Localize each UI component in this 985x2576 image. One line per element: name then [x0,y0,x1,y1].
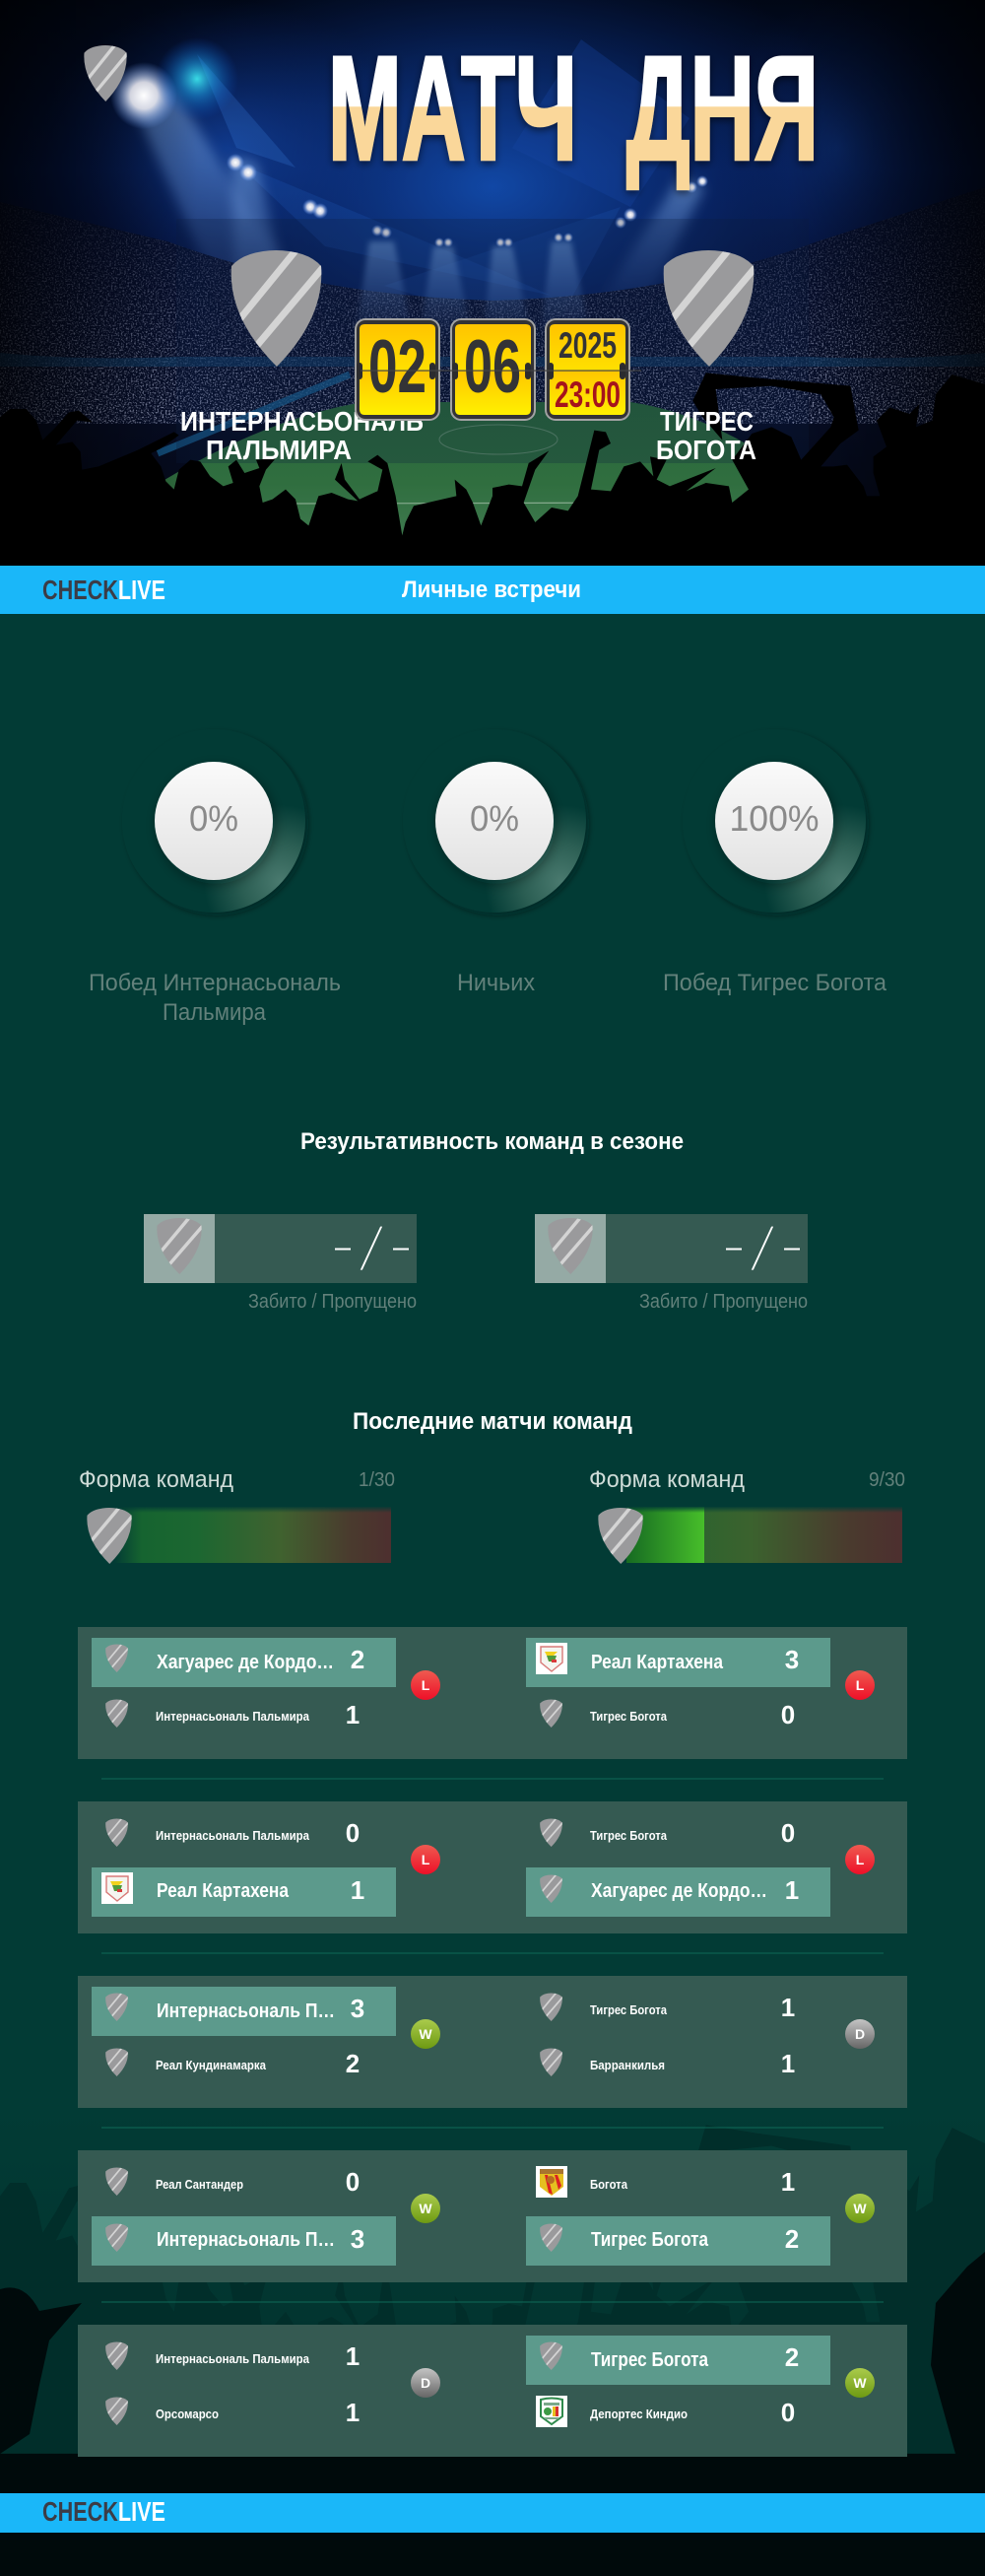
home side result [92,2167,440,2266]
home side result: 1 [346,2341,360,2371]
footer bar [0,2493,985,2533]
home side result: Интернасьональ Пальмира [156,2351,310,2366]
home team name: ПАЛЬМИРА [206,435,352,465]
home team crest [231,248,324,367]
away team crest [664,248,756,367]
home side result: W [419,2201,432,2216]
home side result: Интернасьональ П… [157,2000,335,2022]
home team name [180,406,424,465]
away side result: 0 [781,1818,795,1848]
logo: CheckLive footer: CHECKLIVE [42,2496,165,2527]
heading: recent matches: Последние матчи команд [353,1408,632,1435]
panel: away goals: – [784,1231,800,1263]
home side result: Интернасьональ П… [157,2229,335,2251]
logo: CheckLive: CHECKLIVE [42,575,165,605]
away side result: Тигрес Богота [590,1709,668,1724]
away side result: L [856,1852,865,1867]
away side result [526,2166,875,2266]
panel: home goals: – [335,1231,351,1263]
home side result: W [419,2026,432,2042]
home side result: 3 [351,2224,364,2254]
home side result: 1 [346,1700,360,1729]
home side result: Интернасьональ Пальмира [156,1709,310,1724]
away side result [526,2336,875,2427]
home side result: Реал Картахена [157,1880,290,1902]
panel: home goals [144,1214,417,1283]
stat: draws: 0% [470,798,519,839]
home side result [92,1818,440,1917]
form label: home: 1/30 [359,1469,395,1491]
title: МАТЧ [328,26,577,191]
form label: away [589,1466,905,1493]
away side result: 1 [781,2167,795,2197]
label: home wins: Пальмира [163,999,267,1026]
form label: away: Форма команд [589,1466,745,1493]
away side result: D [855,2026,865,2042]
corner crest icon [84,44,128,102]
stat: draws [403,729,586,913]
away side result: L [856,1677,865,1693]
away side result [540,1993,875,2078]
heading: season performance: Результативность команд в сезоне [300,1128,684,1155]
away side result: Тигрес Богота [591,2349,709,2371]
form label: away: 9/30 [869,1469,905,1491]
home side result: Реал Кундинамарка [156,2058,267,2072]
away side result: W [853,2201,867,2216]
home side result: 1 [346,2398,360,2427]
match panel 1 [78,1627,907,1759]
home side result: L [422,1677,430,1693]
away side result: Тигрес Богота [591,2229,709,2251]
home side result: 2 [351,1645,364,1674]
panel: away goals: / [747,1217,777,1283]
form label: home: Форма команд [79,1466,233,1493]
stat: home wins [122,729,305,913]
label: home wins [89,970,341,1026]
away team name [656,406,756,465]
away side result [526,1638,875,1729]
home side result: 0 [346,2167,360,2197]
home side result [92,1638,440,1729]
away side result: Депортес Киндио [590,2407,688,2421]
bottom crowd backdrop [0,2109,985,2576]
flip card: day: 02 [368,325,427,409]
label: home wins: Побед Интернасьональ [89,970,341,996]
home side result: D [421,2375,430,2391]
panel: away goals: – [726,1231,742,1263]
hero: stadium scene [0,0,985,566]
flip card: month [450,318,536,421]
flip card: day [355,318,440,421]
home side result: Хагуарес де Кордо… [157,1652,334,1673]
away side result: 1 [781,1993,795,2022]
flip card hinge line [361,371,641,372]
away side result: W [853,2375,867,2391]
dark scoreboard panel [176,219,809,463]
crowd silhouette [0,373,985,578]
flip card: month: 06 [464,325,521,409]
away side result: Хагуарес де Кордо… [591,1880,767,1902]
away team name: БОГОТА [656,435,756,465]
match panel 2 [78,1801,907,1933]
away side result [526,1818,875,1917]
flip card: year and kick-off time: 2025 [558,325,617,366]
home side result: L [422,1852,430,1867]
away side result: Тигрес Богота [590,2002,668,2017]
match panel 4 [78,2150,907,2282]
label: draws: Ничьих [457,970,535,996]
away side result: Реал Картахена [591,1652,724,1673]
stat: home wins: 0% [189,798,238,839]
away team name: ТИГРЕС [660,406,754,437]
away side result: Тигрес Богота [590,1828,668,1843]
away side result: Барранкилья [590,2058,665,2072]
home side result: 2 [346,2049,360,2078]
away side result: 2 [785,2224,799,2254]
home side result: 0 [346,1818,360,1848]
match panel 3 [78,1976,907,2108]
away side result: 2 [785,2342,799,2372]
away side result: 3 [785,1645,799,1674]
home side result [105,2341,440,2427]
home side result [92,1987,440,2078]
home side result: Орсомарсо [156,2407,219,2421]
heading: head to head: Личные встречи [402,576,581,603]
form bar: home [87,1507,391,1564]
form bar: away [598,1507,902,1564]
flip card: year and kick-off time [545,318,630,421]
match panel 5 [78,2325,907,2457]
label: away wins: Побед Тигрес Богота [663,970,887,996]
panel: away goals [535,1214,808,1283]
caption: home goals: Забито / Пропущено [248,1291,417,1313]
title: ДНЯ [626,26,819,191]
stat: away wins [683,729,866,913]
stat: away wins: 100% [729,798,820,839]
home team name: ИНТЕРНАСЬОНАЛЬ [180,406,424,437]
away side result: 1 [785,1875,799,1905]
panel: home goals: / [356,1217,386,1283]
home side result: Интернасьональ Пальмира [156,1828,310,1843]
away side result: 0 [781,2398,795,2427]
away side result: Богота [590,2177,628,2192]
home side result: 3 [351,1994,364,2023]
away side result: 0 [781,1700,795,1729]
away side result: 1 [781,2049,795,2078]
home side result: 1 [351,1875,364,1905]
caption: away goals: Забито / Пропущено [639,1291,808,1313]
flip card: year and kick-off time: 23:00 [555,374,621,415]
panel: home goals: – [393,1231,409,1263]
home side result: Реал Сантандер [156,2177,243,2192]
form label: home [79,1466,395,1493]
header bar [0,566,985,614]
